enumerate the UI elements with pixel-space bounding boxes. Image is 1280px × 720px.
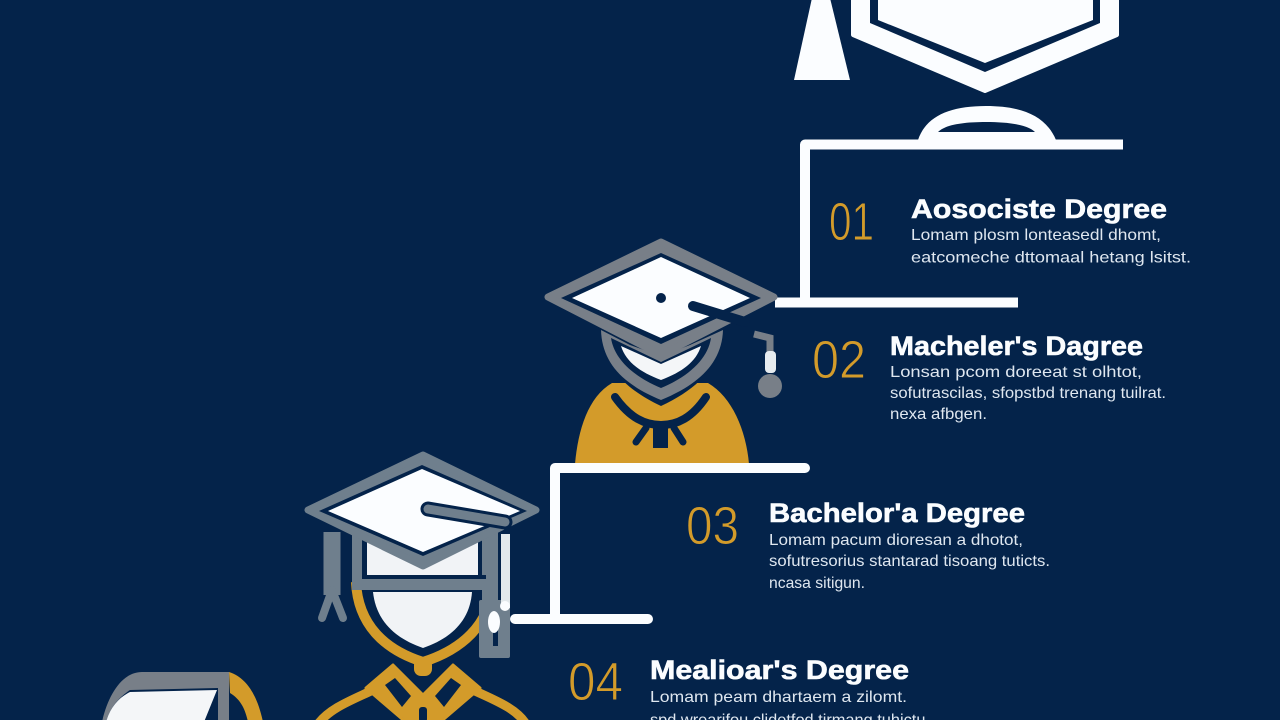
text block: step 03 description: sofutresorius stantarad tisoang tuticts.	[769, 553, 1050, 570]
text block: step 02 description	[890, 364, 1166, 423]
icon: graduate with gold gown, step 02	[548, 242, 782, 464]
heading: bachelor's degree: Bachelor'a Degree	[769, 498, 1025, 528]
text block: step 04 description: Lomam peam dhartaem a zilomt.	[650, 689, 907, 706]
heading: master's degree, step 04: Mealioar's Degree	[650, 655, 909, 685]
step 03	[686, 496, 1050, 592]
step frame: bachelor to master	[515, 468, 805, 619]
step 04	[568, 652, 930, 720]
step 02	[812, 330, 1166, 423]
step 01	[829, 192, 1191, 266]
step frame: associate degree	[775, 144, 1123, 302]
text block: step 02 description: nexa afbgen.	[890, 406, 987, 423]
icon: graduate with gold outline, step 03	[308, 455, 536, 662]
number 02: 02	[812, 330, 866, 390]
number 01: 01	[829, 192, 874, 252]
number 04: 04	[568, 652, 623, 712]
text block: step 02 description: sofutrascilas, sfopstbd trenang tuilrat.	[890, 385, 1166, 402]
number 03: 03	[686, 496, 739, 556]
heading: master's degree: Macheler's Dagree	[890, 331, 1143, 361]
text block: associate description	[911, 227, 1191, 266]
text block: associate description: eatcomeche dttomaal hetang lsitst.	[911, 250, 1191, 266]
text block: step 03 description: ncasa sitigun.	[769, 575, 865, 592]
text block: step 02 description: Lonsan pcom doreeat st olhtot,	[890, 364, 1142, 381]
heading: associate degree: Aosociste Degree	[911, 194, 1167, 224]
text block: step 03 description: Lomam pacum dioresan a dhotot,	[769, 532, 1023, 549]
text block: step 04 description	[650, 689, 930, 720]
icon: bottom-left graduate, cropped	[102, 672, 263, 720]
icon: top figure shoulders	[918, 106, 1056, 140]
text block: step 03 description	[769, 532, 1050, 592]
icon: graduate gown collar, step 04	[318, 658, 526, 720]
text block: associate description: Lomam plosm lonteasedl dhomt,	[911, 227, 1161, 244]
icon: top graduation cap, cropped	[794, 0, 1117, 91]
